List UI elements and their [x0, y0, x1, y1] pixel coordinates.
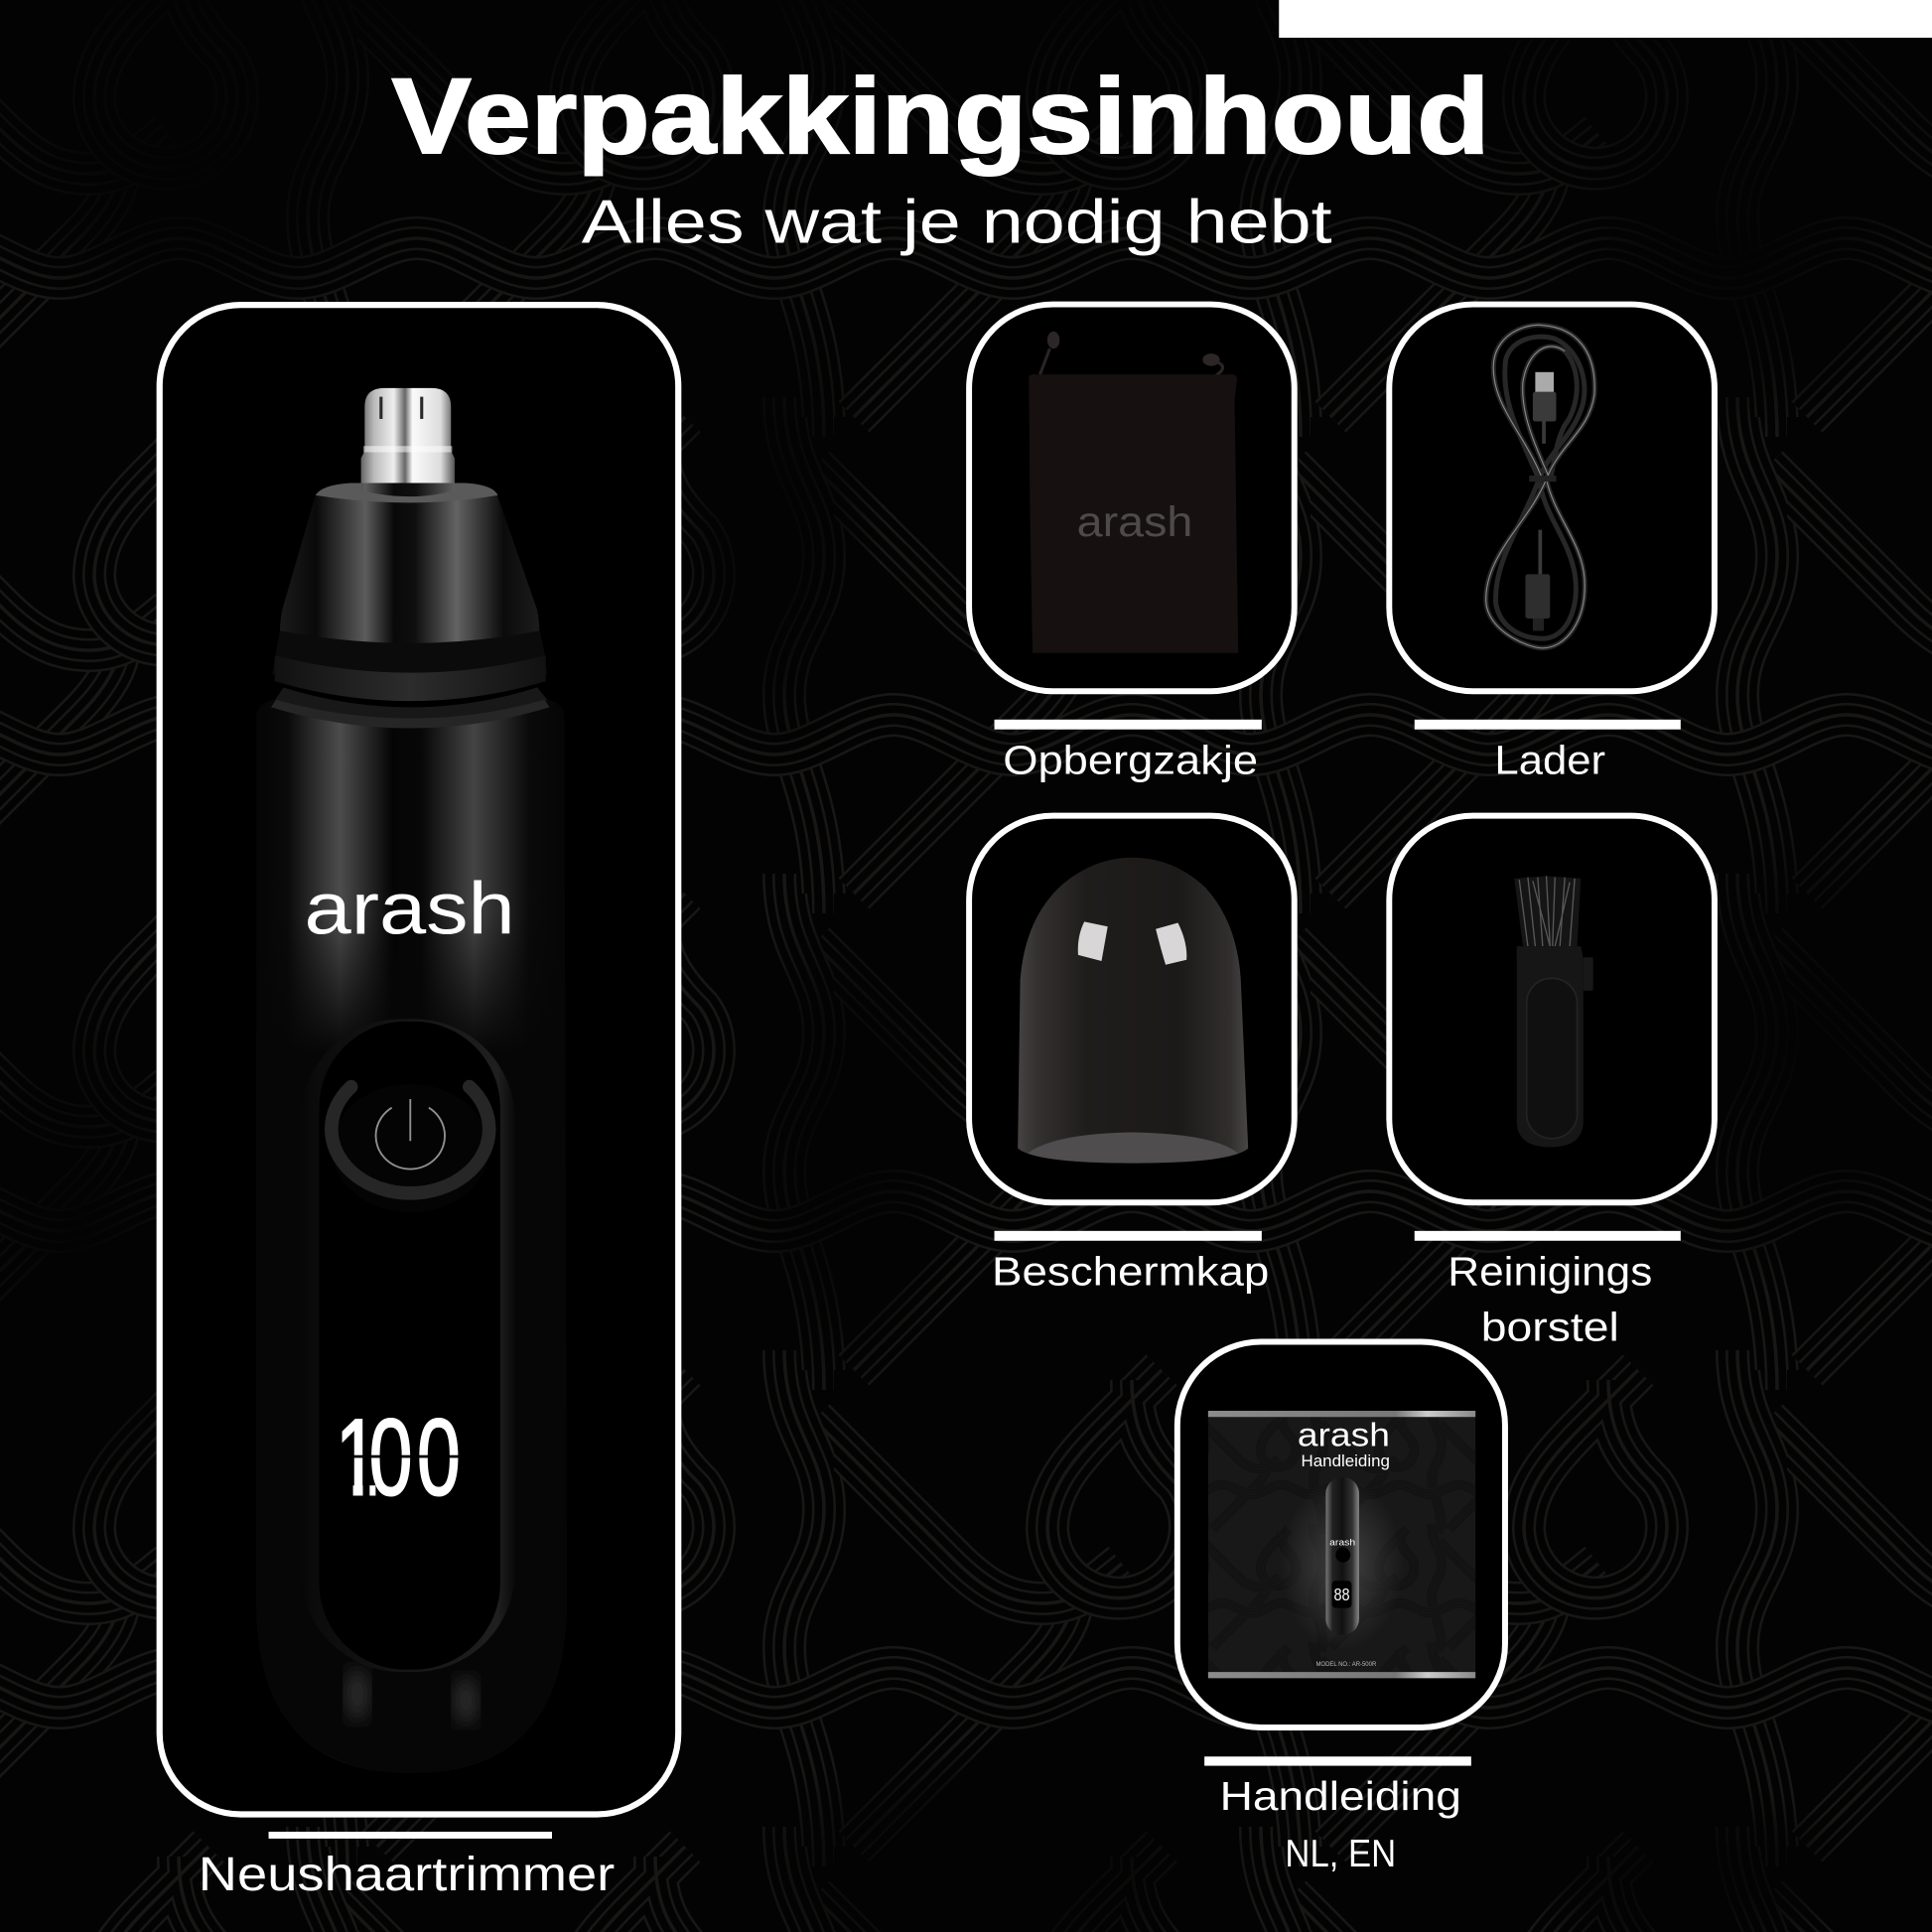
product: storage pouch	[1029, 332, 1238, 653]
label: reinigingsborstel: borstel	[1481, 1304, 1619, 1349]
mini trimmer: arash	[1329, 1537, 1355, 1547]
title: Verpakkingsinhoud	[392, 56, 1489, 176]
white corner block	[1279, 0, 1932, 38]
product: protective cap	[1018, 858, 1248, 1164]
panel: lader	[1389, 305, 1715, 691]
product: manual booklet: MODEL NO.: AR-500R	[1315, 1661, 1377, 1668]
divider: handleiding	[1204, 1756, 1471, 1766]
trimmer body	[256, 688, 567, 1773]
label: reinigingsborstel	[1448, 1248, 1652, 1349]
panel: beschermkap	[969, 816, 1295, 1202]
divider: opbergzakje	[995, 720, 1262, 730]
label: reinigingsborstel: Reinigings	[1448, 1248, 1652, 1294]
trimmer steel head	[361, 388, 455, 495]
label: opbergzakje: Opbergzakje	[1003, 737, 1258, 782]
subtitle: Alles wat je nodig hebt	[582, 188, 1332, 256]
logo: arash: arash	[305, 868, 515, 950]
label: beschermkap: Beschermkap	[992, 1248, 1269, 1294]
battery display: 100	[336, 1398, 461, 1519]
label: lader: Lader	[1494, 737, 1605, 782]
divider: beschermkap	[995, 1231, 1262, 1241]
product: storage pouch: arash	[1077, 498, 1192, 545]
label: handleiding: NL, EN	[1285, 1833, 1396, 1875]
label: neushaartrimmer: Neushaartrimmer	[199, 1848, 615, 1901]
panel: handleiding	[1177, 1342, 1505, 1727]
product: manual booklet: Handleiding	[1302, 1451, 1390, 1470]
divider: reinigingsborstel	[1415, 1231, 1681, 1241]
product: manual booklet	[1208, 1411, 1475, 1678]
panel: opbergzakje	[969, 305, 1295, 691]
product: cleaning brush	[1514, 876, 1593, 1147]
label: handleiding	[1220, 1773, 1461, 1875]
trimmer cone	[272, 483, 547, 701]
control panel recess	[301, 1019, 515, 1672]
power button	[332, 1084, 489, 1212]
product: charging cable	[1486, 325, 1594, 648]
divider: lader	[1415, 720, 1681, 730]
product: nose hair trimmer	[256, 388, 567, 1773]
panel: reinigingsborstel	[1389, 816, 1715, 1202]
label: handleiding: Handleiding	[1220, 1773, 1461, 1819]
mini trimmer	[1325, 1477, 1359, 1635]
divider: neushaartrimmer	[269, 1832, 552, 1839]
icon: power symbol	[376, 1099, 445, 1170]
mini trimmer: 88	[1333, 1585, 1350, 1604]
panel: neushaartrimmer	[160, 305, 678, 1814]
product: manual booklet: arash	[1298, 1417, 1390, 1453]
